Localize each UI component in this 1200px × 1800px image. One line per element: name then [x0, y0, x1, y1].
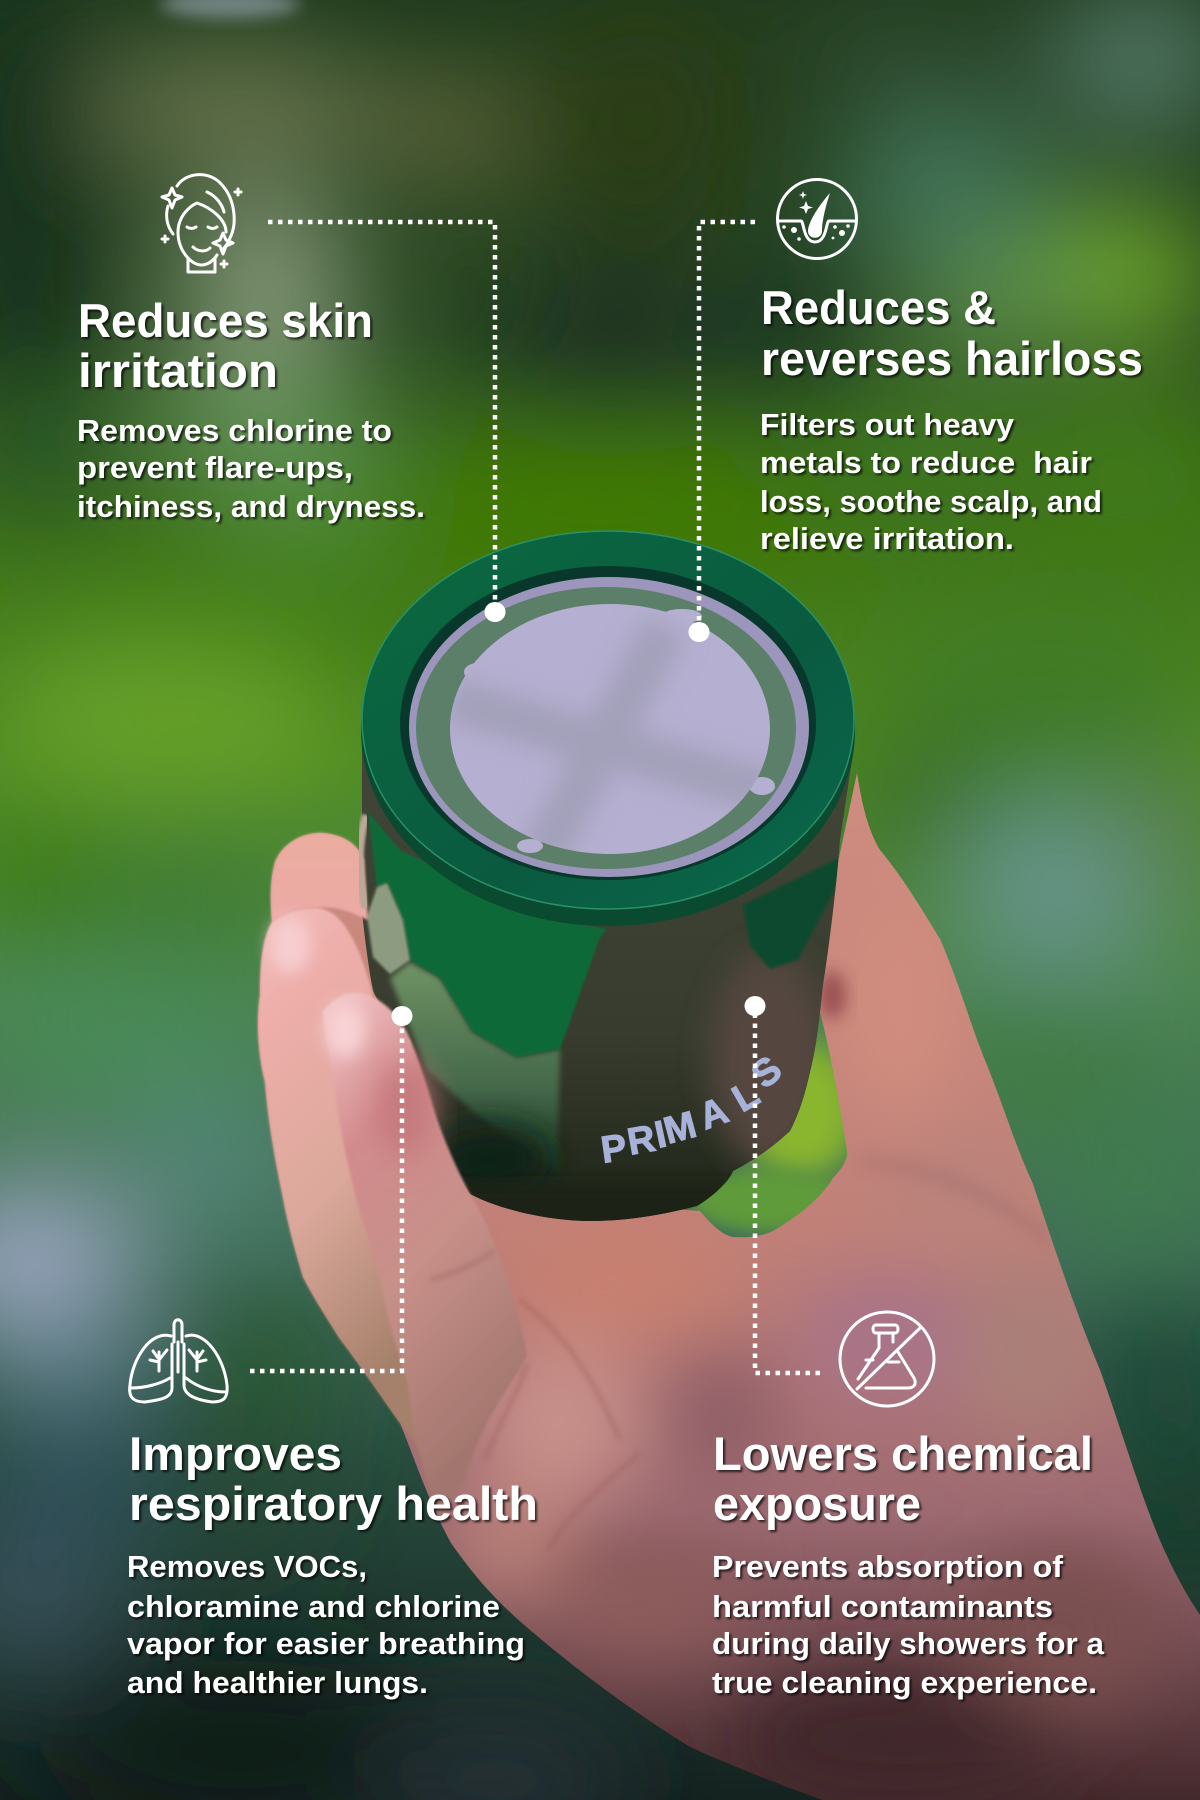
green gasket ring: [416, 587, 796, 869]
text: skin irritation: itchiness, and dryness.: [77, 489, 425, 524]
cartridge body: [362, 740, 855, 1221]
mesh recess: [400, 566, 816, 880]
text: skin irritation: [77, 294, 425, 524]
text: chemical exposure: during daily showers for a: [712, 1626, 1105, 1661]
text: hair loss: [760, 281, 1143, 556]
filter cartridge: [361, 530, 855, 1221]
icon: crossed-out flask: [840, 1312, 934, 1406]
text: skin irritation: Reduces skin: [78, 294, 373, 347]
text: hair loss: Filters out heavy: [760, 407, 1015, 442]
filter mesh: [450, 604, 775, 854]
fingers in front of the cartridge: [258, 815, 527, 1520]
text: respiratory health: Removes VOCs,: [127, 1549, 367, 1584]
text: hair loss: relieve irritation.: [760, 521, 1014, 556]
connector: respiratory health: [250, 1006, 412, 1371]
palm shading: [450, 900, 1160, 1800]
text: skin irritation: irritation: [78, 344, 278, 397]
icon: lungs: [130, 1320, 227, 1402]
text: chemical exposure: exposure: [713, 1477, 921, 1530]
text: chemical exposure: harmful contaminants: [712, 1589, 1053, 1624]
text: chemical exposure: Lowers chemical: [713, 1427, 1093, 1480]
outer rim: [361, 534, 855, 926]
text: chemical exposure: [712, 1427, 1105, 1700]
connector: chemical exposure: [744, 996, 820, 1373]
text: chemical exposure: true cleaning experience.: [712, 1665, 1097, 1700]
text: respiratory health: vapor for easier breathing: [127, 1626, 525, 1661]
text: respiratory health: and healthier lungs.: [127, 1665, 428, 1700]
thumb crease: [877, 1162, 878, 1163]
text: chemical exposure: Prevents absorption of: [712, 1549, 1064, 1584]
text: hair loss: Reduces &: [761, 281, 996, 334]
icon: hair follicle: [778, 180, 856, 258]
text: skin irritation: Removes chlorine to: [77, 413, 392, 448]
text: respiratory health: chloramine and chlorine: [127, 1589, 500, 1624]
palm creases: [485, 1301, 638, 1519]
text: hair loss: reverses hairloss: [761, 332, 1143, 385]
text: respiratory health: Improves: [129, 1427, 342, 1480]
connector: skin irritation: [268, 222, 506, 622]
hand holding the filter: [258, 773, 1200, 1800]
icon: face with towel: [162, 175, 241, 272]
brand label: PRIMALS: [598, 1048, 790, 1172]
text: respiratory health: respiratory health: [129, 1477, 538, 1530]
text: respiratory health: [127, 1427, 538, 1700]
text: skin irritation: prevent flare-ups,: [77, 450, 353, 485]
connector: hair loss: [688, 222, 755, 642]
text: hair loss: metals to reduce hair: [760, 445, 1092, 480]
text: hair loss: loss, soothe scalp, and: [760, 484, 1102, 519]
